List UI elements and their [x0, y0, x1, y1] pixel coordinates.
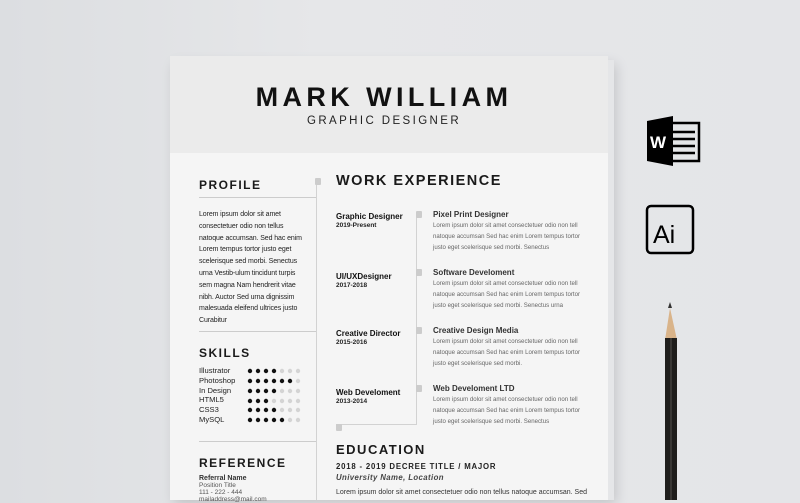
skills list: Illustrator — [199, 366, 230, 375]
job 1: Lorem ipsum dolor sit amet consectetuer odio non tell natoque accumsan Sed hac enim Lorem tempus tortor justo eget scelerisque sed morbi. Senectus — [433, 222, 580, 251]
job 4: 2013-2014 — [336, 398, 367, 405]
profile heading: PROFILE — [199, 178, 262, 192]
job 2 — [336, 268, 580, 309]
left column dividers — [199, 197, 316, 198]
job 3 — [336, 326, 580, 367]
job 2: 2017-2018 — [336, 282, 367, 289]
skills list: Photoshop — [199, 376, 235, 385]
skills list — [199, 366, 235, 424]
header band — [170, 56, 608, 153]
skills list: MySQL — [199, 415, 224, 424]
skills list: HTML5 — [199, 395, 224, 404]
skills list: CSS3 — [199, 405, 219, 414]
icon: illustrator: Ai — [653, 221, 675, 249]
name: MARK WILLIAM — [256, 82, 512, 112]
job 3: Creative Director — [336, 329, 400, 338]
reference details: Referral Name — [199, 475, 246, 482]
paper shadow — [172, 60, 614, 500]
profile text: Lorem ipsum dolor sit amet consectetuer odio non tellus natoque accumsan. Sed hac enim Lorem tempus tortor justo eget scelerisque sed morbi. Senectus urna Vestib-ulum tincidunt turpis sem magna Nam hendrerit vitae nibh. Auctor Sed urna dignissim malesuada eleifend ultrices justo Curabitur — [199, 211, 302, 324]
timeline — [336, 212, 417, 425]
job 3: Creative Design Media — [433, 326, 518, 335]
reference details: mailaddress@mail.com — [199, 496, 267, 503]
job 2: UI/UXDesigner — [336, 272, 392, 281]
degree: 2018 - 2019 DECREE TITLE / MAJOR — [336, 462, 496, 471]
university: University Name, Location — [336, 473, 444, 482]
job 1 — [336, 210, 580, 251]
reference heading: REFERENCE — [199, 456, 287, 470]
job 3: Lorem ipsum dolor sit amet consectetuer odio non tell natoque accumsan Sed hac enim Lorem tempus tortor justo eget scelerisque sed morbi. — [433, 338, 580, 367]
job 4 — [336, 384, 580, 425]
work experience heading: WORK EXPERIENCE — [336, 173, 502, 189]
job 2: Software Develoment — [433, 268, 514, 277]
reference details: 111 - 222 - 444 — [199, 489, 242, 496]
reference details — [199, 474, 267, 503]
job 1: 2019-Present — [336, 222, 376, 229]
icon: illustrator — [646, 204, 694, 254]
resume paper — [170, 56, 608, 500]
icon: word — [647, 116, 700, 166]
job 2: Lorem ipsum dolor sit amet consectetuer odio non tell natoque accumsan Sed hac enim Lorem tempus tortor justo eget scelerisque sed morbi. Senectus urna — [433, 280, 580, 309]
pencil — [665, 302, 677, 500]
education heading: EDUCATION — [336, 442, 426, 457]
job title: GRAPHIC DESIGNER — [307, 115, 461, 127]
job 3: 2015-2016 — [336, 339, 367, 346]
icon: word: W — [650, 133, 667, 152]
job 4: Web Develoment LTD — [433, 384, 514, 393]
skills heading: SKILLS — [199, 346, 251, 360]
job 4: Web Develoment — [336, 388, 400, 397]
education text: Lorem ipsum dolor sit amet consectetuer odio non tellus natoque accumsan. Sed — [336, 489, 587, 496]
job 1: Pixel Print Designer — [433, 210, 509, 219]
reference details: Position Title — [199, 482, 236, 489]
job 4: Lorem ipsum dolor sit amet consectetuer odio non tell natoque accumsan Sed hac enim Lorem tempus tortor justo eget scelerisque sed morbi. Senectus — [433, 396, 580, 425]
skill dots — [248, 368, 300, 422]
skills list: In Design — [199, 386, 231, 395]
job 1: Graphic Designer — [336, 212, 403, 221]
